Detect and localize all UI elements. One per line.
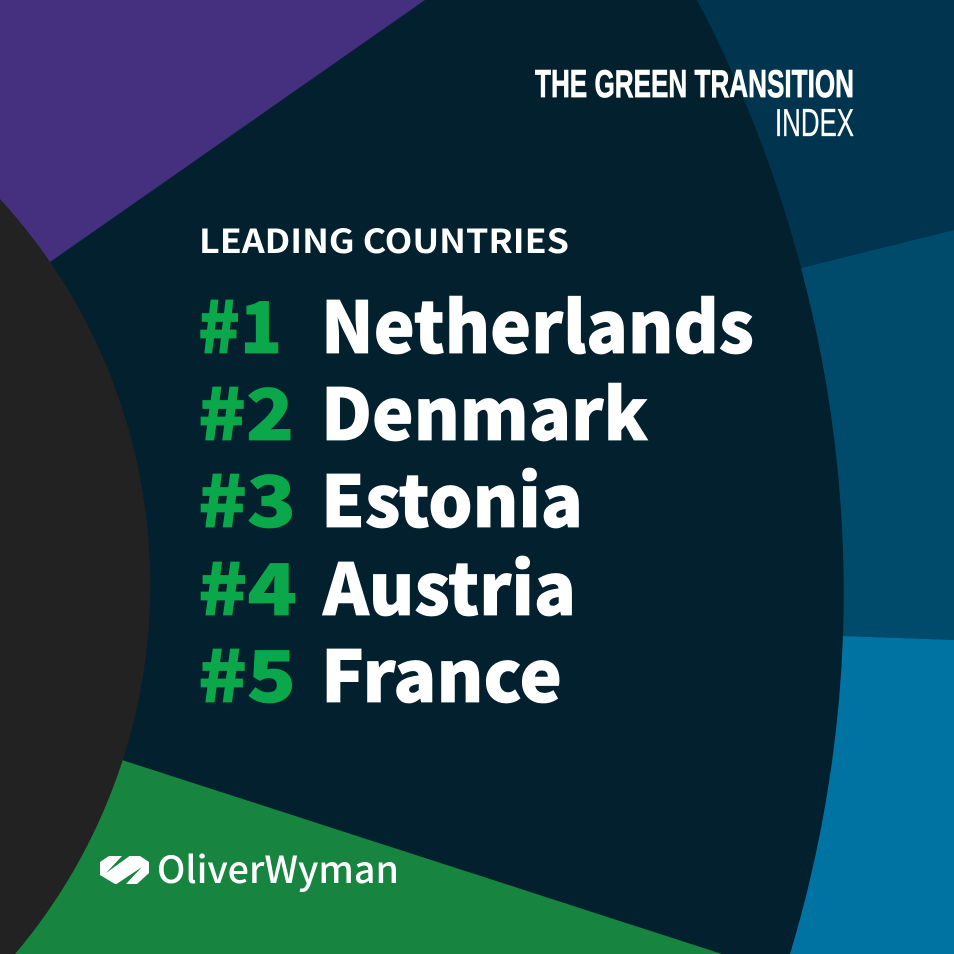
ranking list <box>198 272 754 723</box>
wedge: bright blue <box>790 636 954 954</box>
heading: LEADING COUNTRIES <box>199 215 569 263</box>
wedge: mid blue <box>801 230 954 640</box>
rank 3: #3 <box>198 446 296 548</box>
rank 5: France <box>321 621 562 723</box>
rank 2: Denmark <box>321 359 648 461</box>
rank 5 <box>198 621 562 723</box>
circle: black <box>0 199 150 954</box>
rank 2: #2 <box>198 359 294 461</box>
rank 3: Estonia <box>321 446 583 548</box>
rank 4 <box>198 534 576 636</box>
logo: Oliver Wyman <box>100 840 399 894</box>
rank 1: #1 <box>198 272 282 374</box>
rank 1: Netherlands <box>321 272 754 374</box>
wedge: dark blue <box>697 0 954 268</box>
title <box>535 63 854 145</box>
rank 4: Austria <box>322 534 576 636</box>
wedge: green <box>0 760 722 954</box>
logo wordmark: OliverWyman <box>157 840 399 894</box>
rank 4: #4 <box>198 534 297 636</box>
title: INDEX <box>775 102 854 145</box>
rank 3 <box>198 446 583 548</box>
wedge: purple <box>0 0 425 262</box>
logo icon <box>100 855 149 885</box>
rank 5: #5 <box>198 621 296 723</box>
